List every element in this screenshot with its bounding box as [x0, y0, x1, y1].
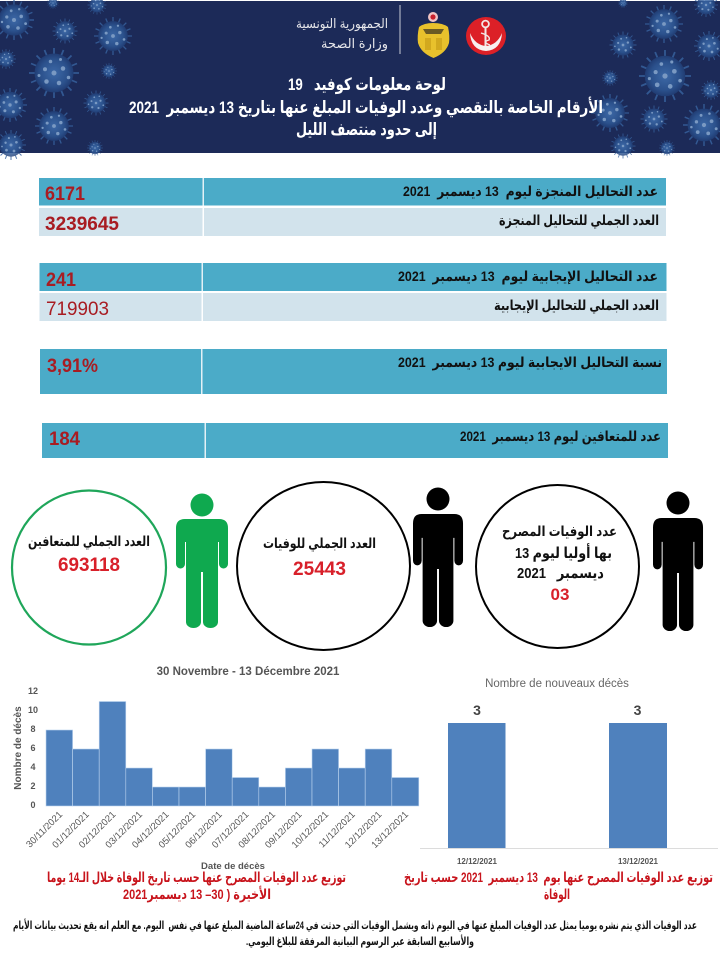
- table row: positivity rate: 3,91%: [47, 356, 98, 377]
- y axis ticks: 8: [30, 724, 36, 734]
- histogram: deaths by date: [13, 666, 419, 872]
- y axis ticks: 12: [28, 686, 38, 696]
- ministry name: وزارة الصحة: [321, 36, 388, 52]
- y axis label: Nombre de décès: [13, 706, 24, 790]
- x axis dates: 13/12/2021: [370, 809, 411, 851]
- bar 13/12: 3: [634, 702, 642, 718]
- stat circle: total recovered: العدد الجملي للمتعافين: [28, 533, 150, 550]
- y axis ticks: 6: [30, 743, 36, 753]
- x axis dates: 12/12/2021: [343, 809, 384, 851]
- stat circle: daily deaths: [476, 485, 639, 648]
- stat circle: total recovered: 693118: [58, 555, 120, 576]
- table row: total positive: العدد الجملي للتحاليل الإيجابية: [494, 297, 659, 314]
- table row: positive today: 241: [46, 270, 76, 291]
- table row: positive today: عدد التحاليل الإيجابية ليوم 13 ديسمبر 2021: [398, 268, 658, 285]
- y axis ticks: 10: [28, 705, 38, 715]
- x axis dates: 07/12/2021: [210, 809, 251, 851]
- icon: black person: [413, 488, 463, 627]
- y axis ticks: 4: [30, 762, 36, 772]
- icon: red crescent anchor: [466, 17, 506, 55]
- bar 13/12: [609, 702, 667, 866]
- bar 13/12: 13/12/2021: [618, 857, 659, 866]
- x axis dates: 30/11/2021: [24, 809, 65, 850]
- x axis dates: [24, 809, 411, 851]
- y axis ticks: 0: [30, 800, 36, 810]
- table row: tests today: عدد التحاليل المنجزة ليوم 13 ديسمبر 2021: [403, 183, 658, 200]
- stat circle: total deaths: 25443: [293, 559, 346, 580]
- footnote: [13, 918, 697, 948]
- stat circle: total recovered: [12, 490, 166, 644]
- table row: recovered today: 184: [49, 429, 80, 450]
- bar 12/12: 12/12/2021: [457, 857, 498, 866]
- table row: total tests: العدد الجملي للتحاليل المنجزة: [499, 212, 659, 229]
- chart title: Nombre de nouveaux décès: [485, 678, 629, 690]
- footnote: والأسابيع السابقة عبر الرسوم البيانية المرفقة للبلاغ اليومي.: [246, 934, 474, 948]
- stat circle: daily deaths: 03: [551, 585, 569, 604]
- icon: green person: [176, 494, 228, 628]
- stat circle: total deaths: العدد الجملي للوفيات: [263, 535, 376, 552]
- table row: recovered today: [42, 423, 668, 458]
- virus pattern left: [0, 0, 132, 160]
- bar 12/12: 3: [473, 702, 481, 718]
- icon: national crest: [418, 12, 449, 58]
- y axis ticks: 2: [30, 781, 36, 791]
- stat circle: daily deaths: بها أوليا ليوم 13: [515, 543, 612, 562]
- title: إلى حدود منتصف الليل: [296, 120, 437, 140]
- caption left: توزيع عدد الوفيات المصرح عنها حسب تاريخ الوفاة خلال الـ14 يوما: [47, 869, 346, 886]
- x axis dates: 11/12/2021: [317, 809, 358, 850]
- x axis label: Date de décès: [201, 861, 265, 872]
- icon: black person right: [653, 492, 703, 631]
- table row: total positive: 719903: [46, 299, 109, 320]
- title: لوحة معلومات كوفيد 19: [288, 75, 446, 95]
- bar 12/12: [448, 702, 506, 866]
- stat circle: daily deaths: عدد الوفيات المصرح: [502, 523, 617, 540]
- bar chart: new deaths: [420, 678, 718, 866]
- table row: positivity rate: نسبة التحاليل الايجابية ليوم 13 ديسمبر 2021: [398, 354, 662, 371]
- table row: recovered today: عدد للمتعافين ليوم 13 ديسمبر 2021: [460, 428, 661, 445]
- stat circle: total deaths: [237, 482, 410, 650]
- chart title: 30 Novembre - 13 Décembre 2021: [157, 666, 340, 678]
- caption right: [404, 869, 713, 903]
- banner header: [0, 0, 720, 160]
- virus pattern right: [591, 0, 720, 158]
- stat circle: daily deaths: ديسمبر 2021: [517, 565, 604, 582]
- x axis dates: 02/12/2021: [77, 809, 118, 851]
- bars: [46, 702, 419, 806]
- caption right: الوفاة: [544, 886, 570, 903]
- table row: total tests: [39, 208, 666, 236]
- ministry name: [296, 16, 388, 52]
- x axis dates: 10/12/2021: [290, 809, 331, 851]
- x axis dates: 08/12/2021: [237, 809, 278, 851]
- table row: tests today: [39, 178, 666, 206]
- table row: total positive: [40, 293, 666, 321]
- ministry name: الجمهورية التونسية: [296, 16, 388, 32]
- caption left: الأخيرة ( 30– 13 ديسمبر2021: [123, 886, 271, 903]
- table row: tests today: 6171: [45, 184, 85, 205]
- x axis dates: 01/12/2021: [50, 809, 92, 851]
- table row: total tests: 3239645: [45, 214, 119, 235]
- x axis dates: 04/12/2021: [130, 809, 172, 851]
- x axis dates: 03/12/2021: [104, 809, 145, 851]
- table row: positive today: [40, 263, 666, 291]
- x axis dates: 06/12/2021: [183, 809, 225, 851]
- y axis ticks: [28, 686, 38, 810]
- table row: positivity rate: [40, 349, 667, 394]
- x axis dates: 09/12/2021: [263, 809, 305, 851]
- title: الأرقام الخاصة بالتقصي وعدد الوفيات المبلغ عنها بتاريخ 13 ديسمبر 2021: [129, 97, 603, 118]
- x axis dates: 05/12/2021: [157, 809, 198, 851]
- title: [129, 75, 603, 140]
- caption left: [47, 869, 346, 903]
